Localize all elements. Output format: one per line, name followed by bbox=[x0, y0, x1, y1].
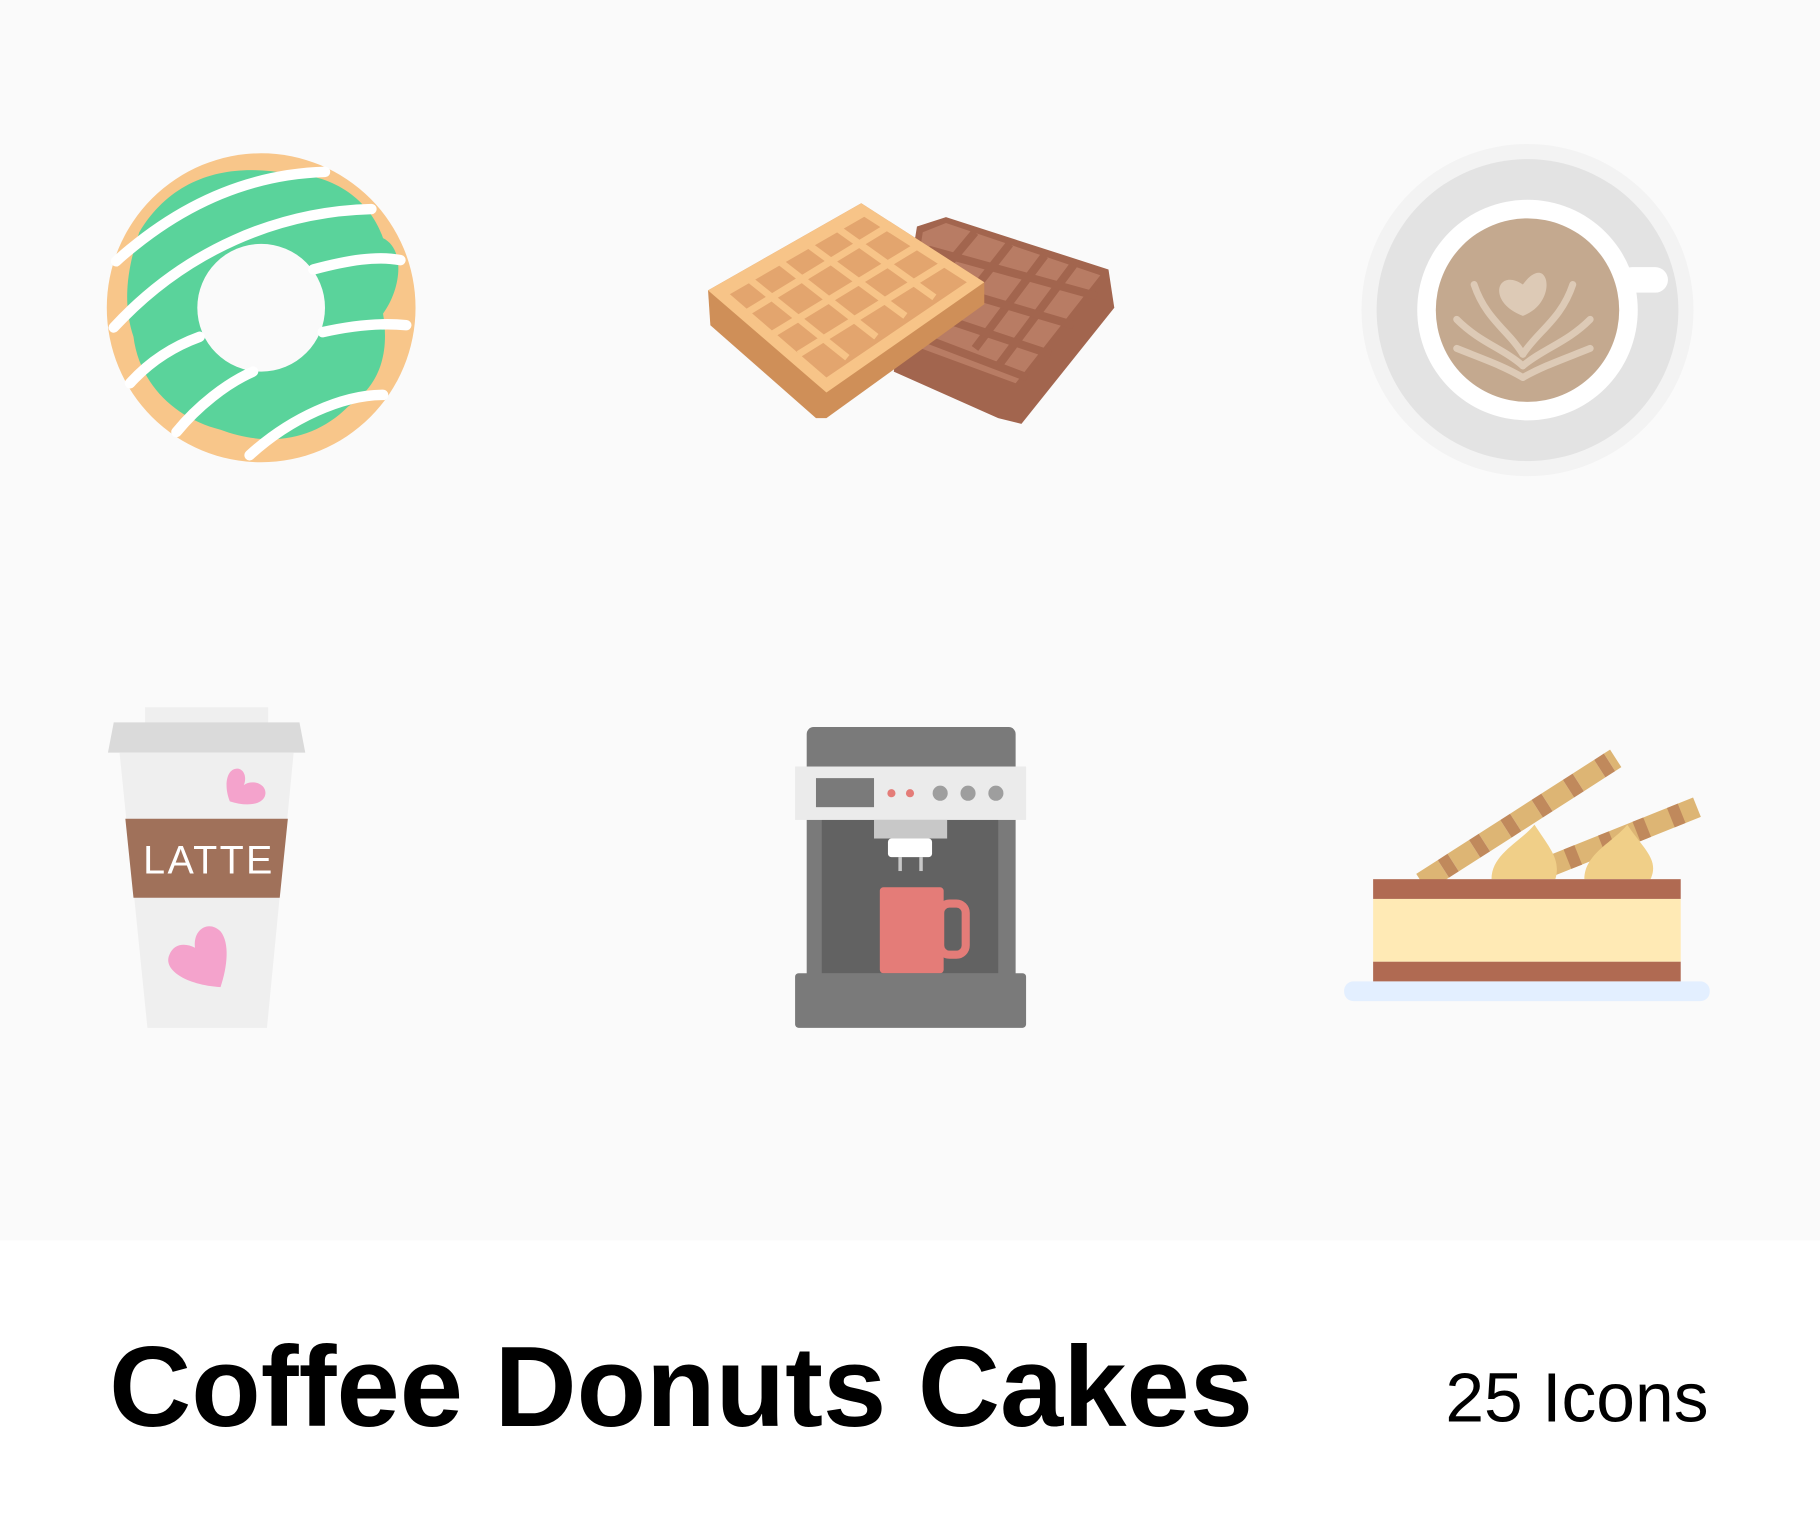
icon: donut bbox=[107, 153, 416, 462]
icon: waffles bbox=[708, 203, 1114, 424]
icon: coffee machine bbox=[795, 727, 1026, 1028]
subtitle: icon count: 25 Icons bbox=[1445, 1359, 1709, 1437]
icon: takeaway latte cup bbox=[108, 707, 305, 1028]
icon: cake slice bbox=[1344, 758, 1710, 1001]
icon: takeaway latte cup: LATTE bbox=[143, 838, 275, 882]
icon: latte cup top view bbox=[1362, 144, 1693, 476]
title: Coffee Donuts Cakes bbox=[109, 1324, 1253, 1451]
